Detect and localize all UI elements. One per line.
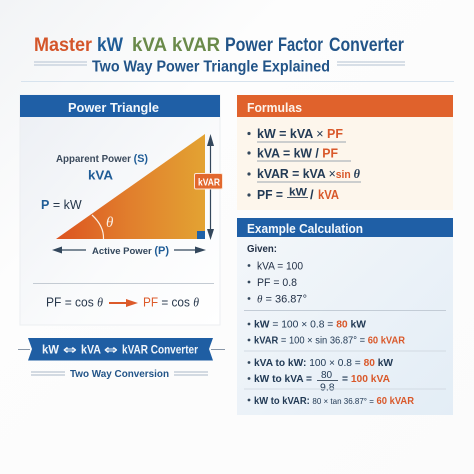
- panel: example calculation: [237, 218, 453, 415]
- subtitle: Two Way Power Triangle Explained: [92, 58, 330, 76]
- title: Factor: [278, 34, 323, 56]
- title: Converter: [329, 34, 404, 56]
- arrow: kVAR vertical: [207, 134, 214, 240]
- banner: converter: kVAR Converter: [122, 344, 198, 356]
- subtitle: [34, 58, 405, 76]
- title: [34, 34, 404, 56]
- formula: PF = cos theta: [46, 294, 200, 310]
- formula: PF: kW: [289, 186, 308, 198]
- panel: formulas: [237, 95, 453, 210]
- given values: Given:: [247, 243, 277, 255]
- label: P = kW: P = kW: [41, 198, 82, 212]
- conversion: kW to kVA: 9.8: [320, 382, 335, 394]
- panel: power triangle: [20, 95, 222, 325]
- given values: [247, 243, 307, 306]
- triangle diagram: θ: [106, 215, 114, 231]
- banner: converter: ⇔: [63, 343, 77, 358]
- conversion: kW to kVA: = 100 kVA: [342, 373, 390, 385]
- label: kVAR: [194, 174, 222, 189]
- heading: power triangle: [20, 95, 220, 117]
- title: Master: [34, 34, 92, 56]
- triangle diagram: [56, 134, 205, 239]
- heading: power triangle: Power Triangle: [68, 100, 159, 115]
- label: apparent power: kVA: [88, 168, 113, 182]
- label: apparent power: Apparent Power (S): [56, 153, 148, 165]
- arrow: active power: Active Power (P): [92, 245, 169, 257]
- given values: θ = 36.87°: [257, 294, 307, 306]
- banner: converter: ⇔: [104, 343, 118, 358]
- formula: PF: PF =: [257, 187, 283, 202]
- banner: converter: [18, 338, 225, 360]
- conversion: kW to kVAR: kW to kVAR: 80 × tan 36.87° = 60 kVAR: [254, 396, 415, 407]
- title: kVAR: [172, 34, 220, 56]
- formula: kW: kW = kVA × PF: [257, 126, 343, 141]
- formula: PF: /: [310, 187, 314, 202]
- result: kVAR: kVAR = 100 × sin 36.87° = 60 kVAR: [254, 336, 406, 346]
- banner: converter: kVA: [81, 344, 101, 356]
- formula: PF: kVA: [318, 187, 340, 202]
- formula: PF = cos theta: PF = cos θ: [46, 294, 104, 310]
- arrow: active power: [52, 245, 206, 257]
- conversion: kVA to kW: kVA to kW: 100 × 0.8 = 80 kW: [254, 357, 393, 369]
- title: kVA: [132, 34, 167, 56]
- banner: converter: kW: [42, 344, 59, 356]
- heading: example calculation: Example Calculation: [247, 222, 363, 236]
- given values: kVA = 100: [257, 260, 303, 272]
- title: Power: [225, 34, 273, 56]
- heading: formulas: Formulas: [247, 100, 302, 115]
- title: kW: [97, 34, 124, 56]
- caption: two way conversion: [31, 368, 208, 380]
- heading: example calculation: [237, 218, 453, 237]
- formula: PF = cos theta: PF = cos θ: [143, 294, 200, 310]
- formula: kVAR: kVAR = kVA ×sin θ: [257, 166, 360, 181]
- formula: kVA: kVA = kW / PF: [257, 146, 338, 160]
- heading: formulas: [237, 95, 453, 117]
- caption: two way conversion: Two Way Conversion: [70, 368, 169, 380]
- label: kVAR: kVAR: [198, 178, 221, 188]
- formula: PF: [247, 186, 340, 202]
- result: kW: kW = 100 × 0.8 = 80 kW: [254, 318, 366, 330]
- conversion: kW to kVA: 80: [321, 370, 333, 381]
- conversion: kW to kVA: kW to kVA =: [254, 373, 312, 385]
- conversion: kW to kVA: [248, 370, 390, 394]
- label: apparent power: [56, 153, 148, 182]
- given values: PF = 0.8: [257, 277, 297, 289]
